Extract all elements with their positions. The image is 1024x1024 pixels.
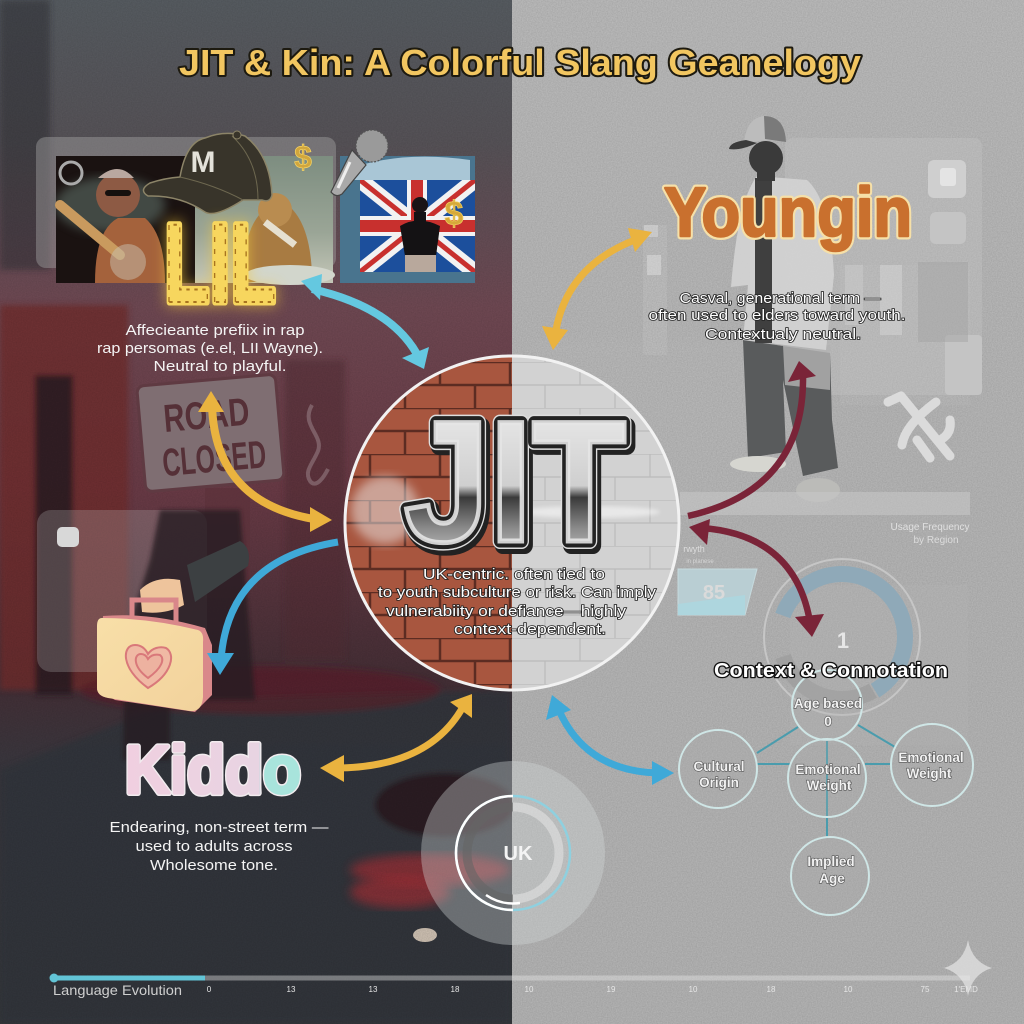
JIT description: context-dependent. bbox=[454, 621, 606, 638]
timeline: language evolution: 0 bbox=[207, 985, 212, 994]
timeline: language evolution: 18 bbox=[451, 985, 460, 994]
timeline: language evolution: 10 bbox=[844, 985, 853, 994]
node: emotional weight center: Weight bbox=[807, 778, 852, 793]
faded stat card: 85 bbox=[703, 582, 725, 604]
road closed sign: ROAD bbox=[162, 391, 251, 441]
decorative smoke bbox=[308, 405, 328, 484]
timeline: language evolution: 18 bbox=[767, 985, 776, 994]
Youngin heading: Youngin bbox=[664, 173, 912, 251]
icon: sparkle star bbox=[944, 940, 992, 996]
usage frequency label: Usage Frequency bbox=[891, 522, 969, 533]
UK radial dial bbox=[421, 761, 605, 945]
Youngin heading: Youngin bbox=[664, 173, 912, 251]
Kiddo heading: Kiddo bbox=[125, 732, 301, 808]
dark figure holding lunchbox bbox=[123, 510, 255, 760]
node: cultural origin: Cultural bbox=[693, 759, 745, 774]
timeline: language evolution: 10 bbox=[525, 985, 534, 994]
Youngin description: often used to elders toward youth. bbox=[648, 307, 906, 324]
LIL description: rap persomas (e.el, LII Wayne). bbox=[97, 340, 323, 357]
usage gauge: 1 bbox=[837, 628, 849, 653]
photo: union flag bbox=[340, 156, 475, 283]
node: age based: Age based bbox=[794, 696, 862, 711]
central JIT medallion bbox=[340, 350, 684, 700]
Kiddo heading: Kiddo bbox=[125, 732, 301, 808]
JIT wordmark: JIT bbox=[404, 386, 626, 578]
panel: photo strip bbox=[36, 137, 475, 285]
timeline: language evolution: 75 bbox=[921, 985, 930, 994]
icon: gold dollar sign: $ bbox=[294, 139, 312, 175]
node: emotional weight center bbox=[788, 739, 866, 817]
node: cultural origin: Origin bbox=[699, 775, 739, 790]
Youngin description: Casval, generational term — bbox=[680, 290, 880, 307]
title: JIT & Kin: A Colorful Slang Geanelogy bbox=[179, 42, 861, 83]
node: emotional weight center: Emotional bbox=[795, 762, 861, 777]
timeline: language evolution: 13 bbox=[369, 985, 378, 994]
arrow: Kiddo to JIT bbox=[320, 694, 472, 782]
timeline: language evolution: 19 bbox=[607, 985, 616, 994]
icon: baseball cap bbox=[143, 131, 272, 214]
icon: baseball cap: M bbox=[190, 146, 216, 179]
faded stat card: in planese bbox=[686, 559, 714, 565]
JIT description: UK-centric. often tied to bbox=[423, 566, 605, 583]
photo: union flag: $ bbox=[445, 195, 464, 233]
node: implied age: Age bbox=[819, 871, 845, 886]
LIL description: Neutral to playful. bbox=[154, 358, 286, 375]
arrow: JIT to Youngin bbox=[688, 361, 816, 516]
grey street signs bbox=[644, 225, 968, 342]
usage frequency label: by Region bbox=[913, 535, 959, 546]
road closed sign bbox=[137, 374, 284, 598]
Context heading: Context & Connotation bbox=[714, 660, 948, 682]
usage gauge bbox=[757, 552, 968, 745]
background: right grey street scene bbox=[512, 0, 1024, 1024]
node: implied age bbox=[791, 837, 869, 915]
node: cultural origin bbox=[679, 730, 757, 808]
faded left panel bbox=[37, 510, 207, 672]
UK radial dial: UK bbox=[504, 843, 533, 865]
LIL word in gold chain: LIL bbox=[164, 201, 276, 326]
JIT wordmark: JIT bbox=[404, 386, 626, 578]
usage frequency label bbox=[891, 522, 969, 546]
arrow: JIT to context bbox=[546, 695, 674, 785]
photo: bear figure bbox=[195, 156, 335, 285]
arrow: JIT to context heading bbox=[689, 519, 824, 637]
panel: faded icon column bbox=[785, 138, 982, 395]
node: emotional weight right: Weight bbox=[907, 766, 952, 781]
node diagram bbox=[679, 670, 973, 915]
JIT wordmark: JIT bbox=[404, 386, 626, 578]
LIL word in gold chain: LIL bbox=[164, 201, 276, 326]
timeline: language evolution: 1'EMD bbox=[954, 985, 978, 994]
JIT wordmark: JIT bbox=[407, 390, 629, 582]
Youngin description: Contextualy neutral. bbox=[705, 326, 861, 343]
grey figure in cap bbox=[729, 116, 840, 502]
Kiddo description: Endearing, non-street term — bbox=[110, 819, 328, 836]
arrow: LIL to JIT bbox=[301, 274, 429, 369]
LIL description: Affecieante prefiix in rap bbox=[126, 322, 304, 339]
JIT description: vulnerabiity or defiance—highly bbox=[386, 603, 627, 620]
arrow: Youngin to JIT bbox=[542, 228, 652, 350]
timeline: language evolution bbox=[50, 974, 978, 998]
LIL word in gold chain: LIL bbox=[164, 201, 276, 326]
LIL word in gold chain bbox=[164, 201, 276, 326]
node: age based bbox=[792, 670, 862, 740]
faded bar panel bbox=[680, 492, 970, 515]
node: emotional weight right: Emotional bbox=[898, 750, 964, 765]
icon: microphone bbox=[331, 130, 388, 196]
photo: rapper bbox=[55, 156, 195, 283]
timeline: language evolution: 13 bbox=[287, 985, 296, 994]
Kiddo description: Wholesome tone. bbox=[150, 857, 278, 874]
LIL description bbox=[97, 322, 323, 375]
arrow: JIT to lunchbox bbox=[207, 542, 338, 675]
arrow: JIT to road sign bbox=[198, 391, 332, 532]
icon: faded tools bbox=[888, 396, 950, 458]
timeline: language evolution: Language Evolution bbox=[53, 982, 182, 998]
JIT description bbox=[378, 566, 657, 638]
faded stat card bbox=[678, 544, 757, 615]
node: implied age: Implied bbox=[807, 854, 855, 869]
faded stat card: rwyth bbox=[683, 544, 705, 554]
timeline: language evolution: 10 bbox=[689, 985, 698, 994]
road closed sign: CLOSED bbox=[161, 433, 268, 485]
node: age based: 0 bbox=[824, 714, 832, 729]
Kiddo description bbox=[110, 819, 328, 874]
Kiddo description: used to adults across bbox=[136, 838, 292, 855]
node: emotional weight right bbox=[891, 724, 973, 806]
icon: lunchbox with heart bbox=[97, 600, 212, 712]
background: left street scene bbox=[0, 0, 515, 1024]
Youngin description bbox=[648, 290, 906, 343]
JIT description: to youth subculture or risk. Can imply bbox=[378, 584, 657, 601]
